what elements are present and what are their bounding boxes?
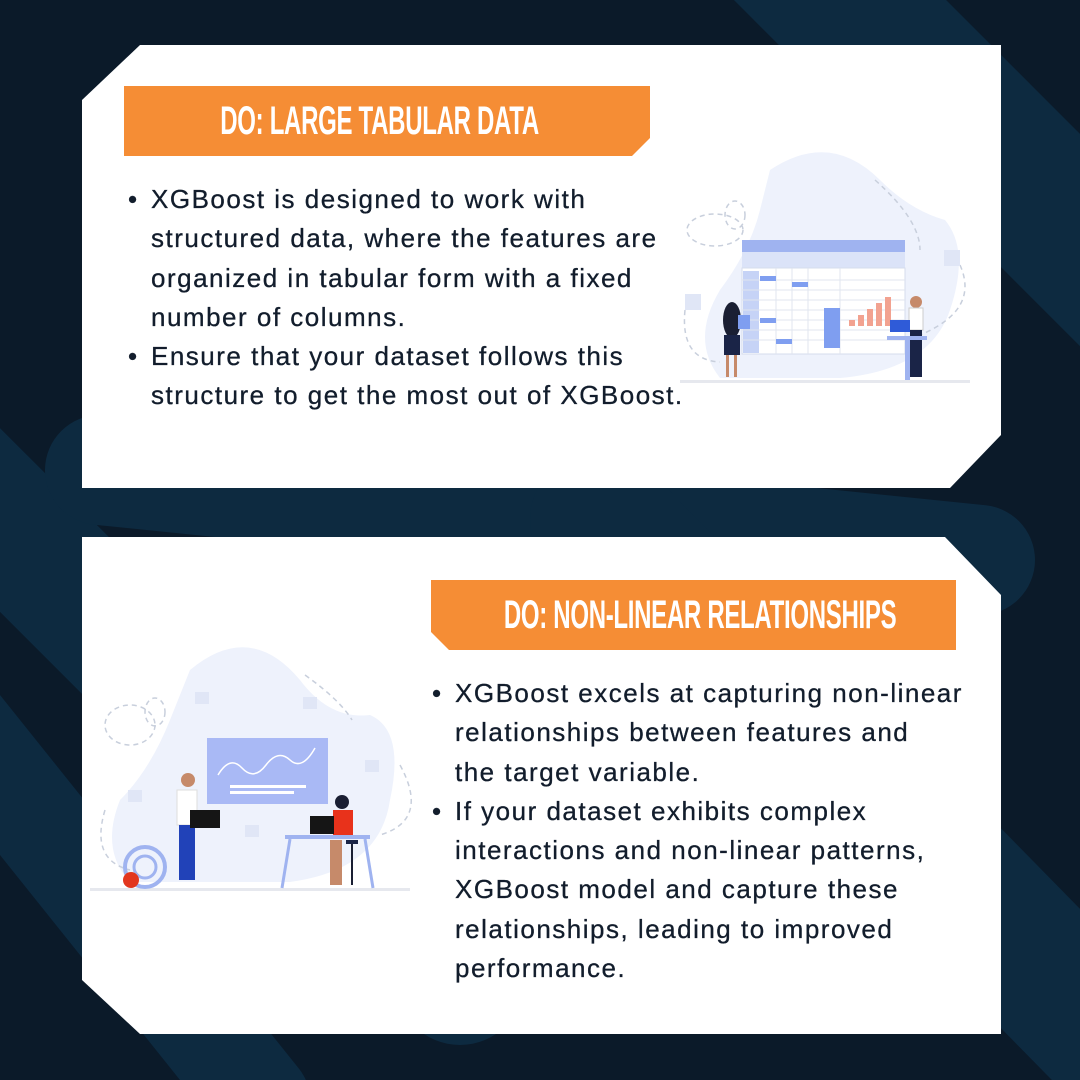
panel: large tabular data xyxy=(82,45,1001,488)
text block: non-linear bullets: performance. xyxy=(455,953,626,983)
banner: DO: NON-LINEAR RELATIONSHIPS xyxy=(431,580,956,650)
text block: non-linear bullets: relationships, leading to improved xyxy=(455,914,893,944)
text block: tabular data bullets: Ensure that your dataset follows this xyxy=(151,341,624,371)
text block: tabular data bullets xyxy=(128,184,684,410)
text block: non-linear bullets: the target variable. xyxy=(455,757,700,787)
illustration: presentation with people xyxy=(90,648,412,891)
text block: tabular data bullets: XGBoost is designed to work with xyxy=(151,184,586,214)
banner: DO: LARGE TABULAR DATA: DO: LARGE TABULAR DATA xyxy=(221,98,539,142)
text block: tabular data bullets: structure to get the most out of XGBoost. xyxy=(151,380,684,410)
text block: non-linear bullets: relationships between features and xyxy=(455,717,909,747)
text block: non-linear bullets: XGBoost excels at capturing non-linear xyxy=(455,678,963,708)
illustration: spreadsheet with people xyxy=(680,152,970,383)
text block: tabular data bullets: structured data, where the features are xyxy=(151,223,658,253)
text block: non-linear bullets: XGBoost model and capture these xyxy=(455,874,899,904)
banner: DO: LARGE TABULAR DATA xyxy=(124,86,650,156)
banner: DO: NON-LINEAR RELATIONSHIPS: DO: NON-LINEAR RELATIONSHIPS xyxy=(504,592,897,636)
text block: tabular data bullets: organized in tabular form with a fixed xyxy=(151,263,633,293)
text block: tabular data bullets: number of columns. xyxy=(151,302,406,332)
text block: non-linear bullets: interactions and non-linear patterns, xyxy=(455,835,925,865)
text block: non-linear bullets xyxy=(432,678,963,983)
panel: non-linear relationships xyxy=(82,537,1001,1034)
text block: non-linear bullets: If your dataset exhibits complex xyxy=(455,796,867,826)
